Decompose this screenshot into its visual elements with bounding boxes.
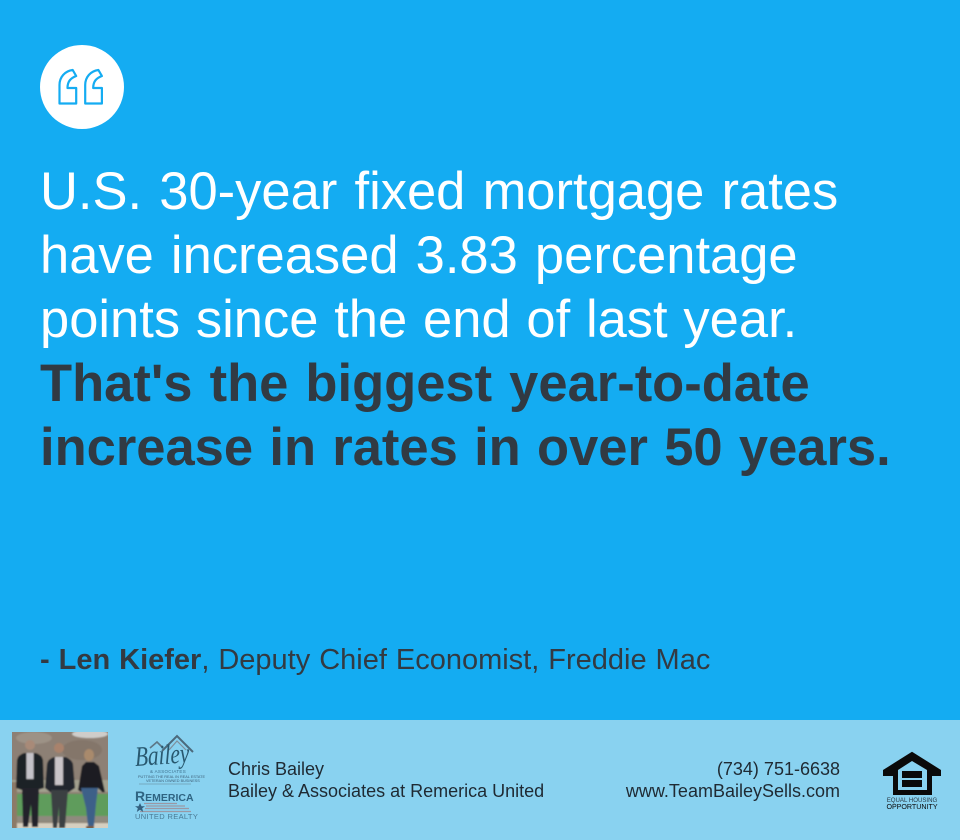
- caption: EQUAL HOUSING: [887, 796, 937, 804]
- icon: house roofs: [139, 734, 194, 784]
- tagline: [138, 775, 205, 783]
- center man: [54, 743, 64, 753]
- left man: [25, 740, 35, 750]
- wordmark: REMERICA: [135, 788, 194, 804]
- quote text: [40, 162, 891, 477]
- caption: [886, 796, 938, 810]
- subline: UNITED REALTY: [135, 812, 198, 821]
- quote text: U.S. 30-year fixed mortgage rates: [40, 162, 838, 221]
- logo: Bailey and Associates: [134, 734, 205, 784]
- quote text: That's the biggest year-to-date: [40, 354, 810, 413]
- quote text: points since the end of last year.: [40, 290, 797, 349]
- icon: flag stripes and star: [135, 802, 191, 812]
- contact details: www.TeamBaileySells.com: [626, 781, 840, 801]
- woman: [84, 749, 94, 761]
- icon: equal housing opportunity: [883, 752, 941, 810]
- tagline: PUTTING THE REAL IN REAL ESTATE: [138, 775, 205, 779]
- contact details: (734) 751-6638: [717, 759, 840, 779]
- caption: OPPORTUNITY: [886, 802, 938, 810]
- quote text: have increased 3.83 percentage: [40, 226, 798, 285]
- agent photo: [12, 732, 108, 828]
- house symbol: [883, 752, 941, 795]
- associates line: & ASSOCIATES: [150, 769, 186, 774]
- agent name and company: Chris Bailey: [228, 759, 324, 779]
- quote text: increase in rates in over 50 years.: [40, 418, 891, 477]
- footer band: [0, 720, 960, 840]
- logo: Remerica United Realty: [135, 788, 198, 821]
- agent name and company: Bailey & Associates at Remerica United: [228, 781, 544, 801]
- tagline: VETERAN OWNED BUSINESS: [146, 779, 200, 783]
- icon: quotation mark badge: [40, 45, 124, 129]
- script wordmark: Bailey: [134, 738, 190, 773]
- contact details: [626, 759, 840, 801]
- attribution: - Len Kiefer, Deputy Chief Economist, Freddie Mac: [40, 644, 710, 676]
- agent name and company: [228, 759, 544, 801]
